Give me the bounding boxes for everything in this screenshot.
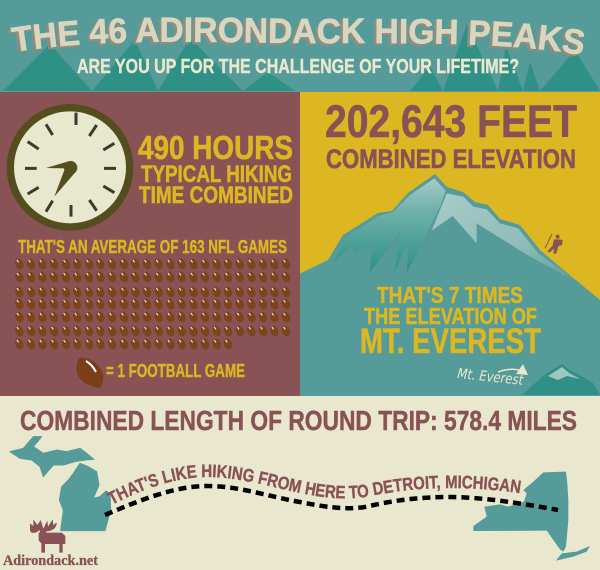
panel: hiking time <box>0 92 300 396</box>
panel: elevation <box>300 92 600 396</box>
stat: 490 hours: TIME COMBINED <box>139 182 293 209</box>
text: 7 times Everest: THE ELEVATION OF <box>364 303 537 329</box>
text: 7 times Everest: MT. EVEREST <box>360 322 541 361</box>
map: New York <box>473 472 590 561</box>
icon: clock <box>7 104 133 231</box>
panel: round trip <box>3 405 590 569</box>
stat: 490 hours <box>138 129 293 209</box>
illustration: mountain <box>300 174 600 396</box>
logo text: Adirondack.net <box>3 553 98 569</box>
text: 7 times Everest <box>360 282 541 361</box>
icon: hiker <box>545 234 563 254</box>
map: Michigan <box>10 437 111 531</box>
text: 7 times Everest: THAT'S 7 TIMES <box>377 282 523 308</box>
curved caption: THAT'S LIKE HIKING FROM HERE TO DETROIT, MICHIGAN <box>106 464 521 504</box>
logo: moose <box>3 519 98 569</box>
arrow <box>498 364 528 375</box>
stat: 202,643 feet <box>325 96 577 174</box>
stat: 490 hours: 490 HOURS <box>138 129 293 166</box>
label: Mt. Everest: Mt. Everest <box>457 366 524 389</box>
legend: football <box>77 358 245 388</box>
title: THE 46 ADIRONDACK HIGH PEAKS <box>8 19 582 56</box>
title: THE 46 ADIRONDACK HIGH PEAKS <box>10 17 584 54</box>
route: dashed line <box>105 486 558 515</box>
chart: 163 footballs <box>14 257 292 351</box>
header mountains <box>3 24 600 91</box>
stat: 490 hours: TYPICAL HIKING <box>141 161 292 188</box>
legend: football: = 1 FOOTBALL GAME <box>106 361 245 381</box>
heading: NFL games: THAT'S AN AVERAGE OF 163 NFL GAMES <box>18 237 287 257</box>
panel: header <box>0 0 600 92</box>
icon: small Everest <box>522 364 600 395</box>
